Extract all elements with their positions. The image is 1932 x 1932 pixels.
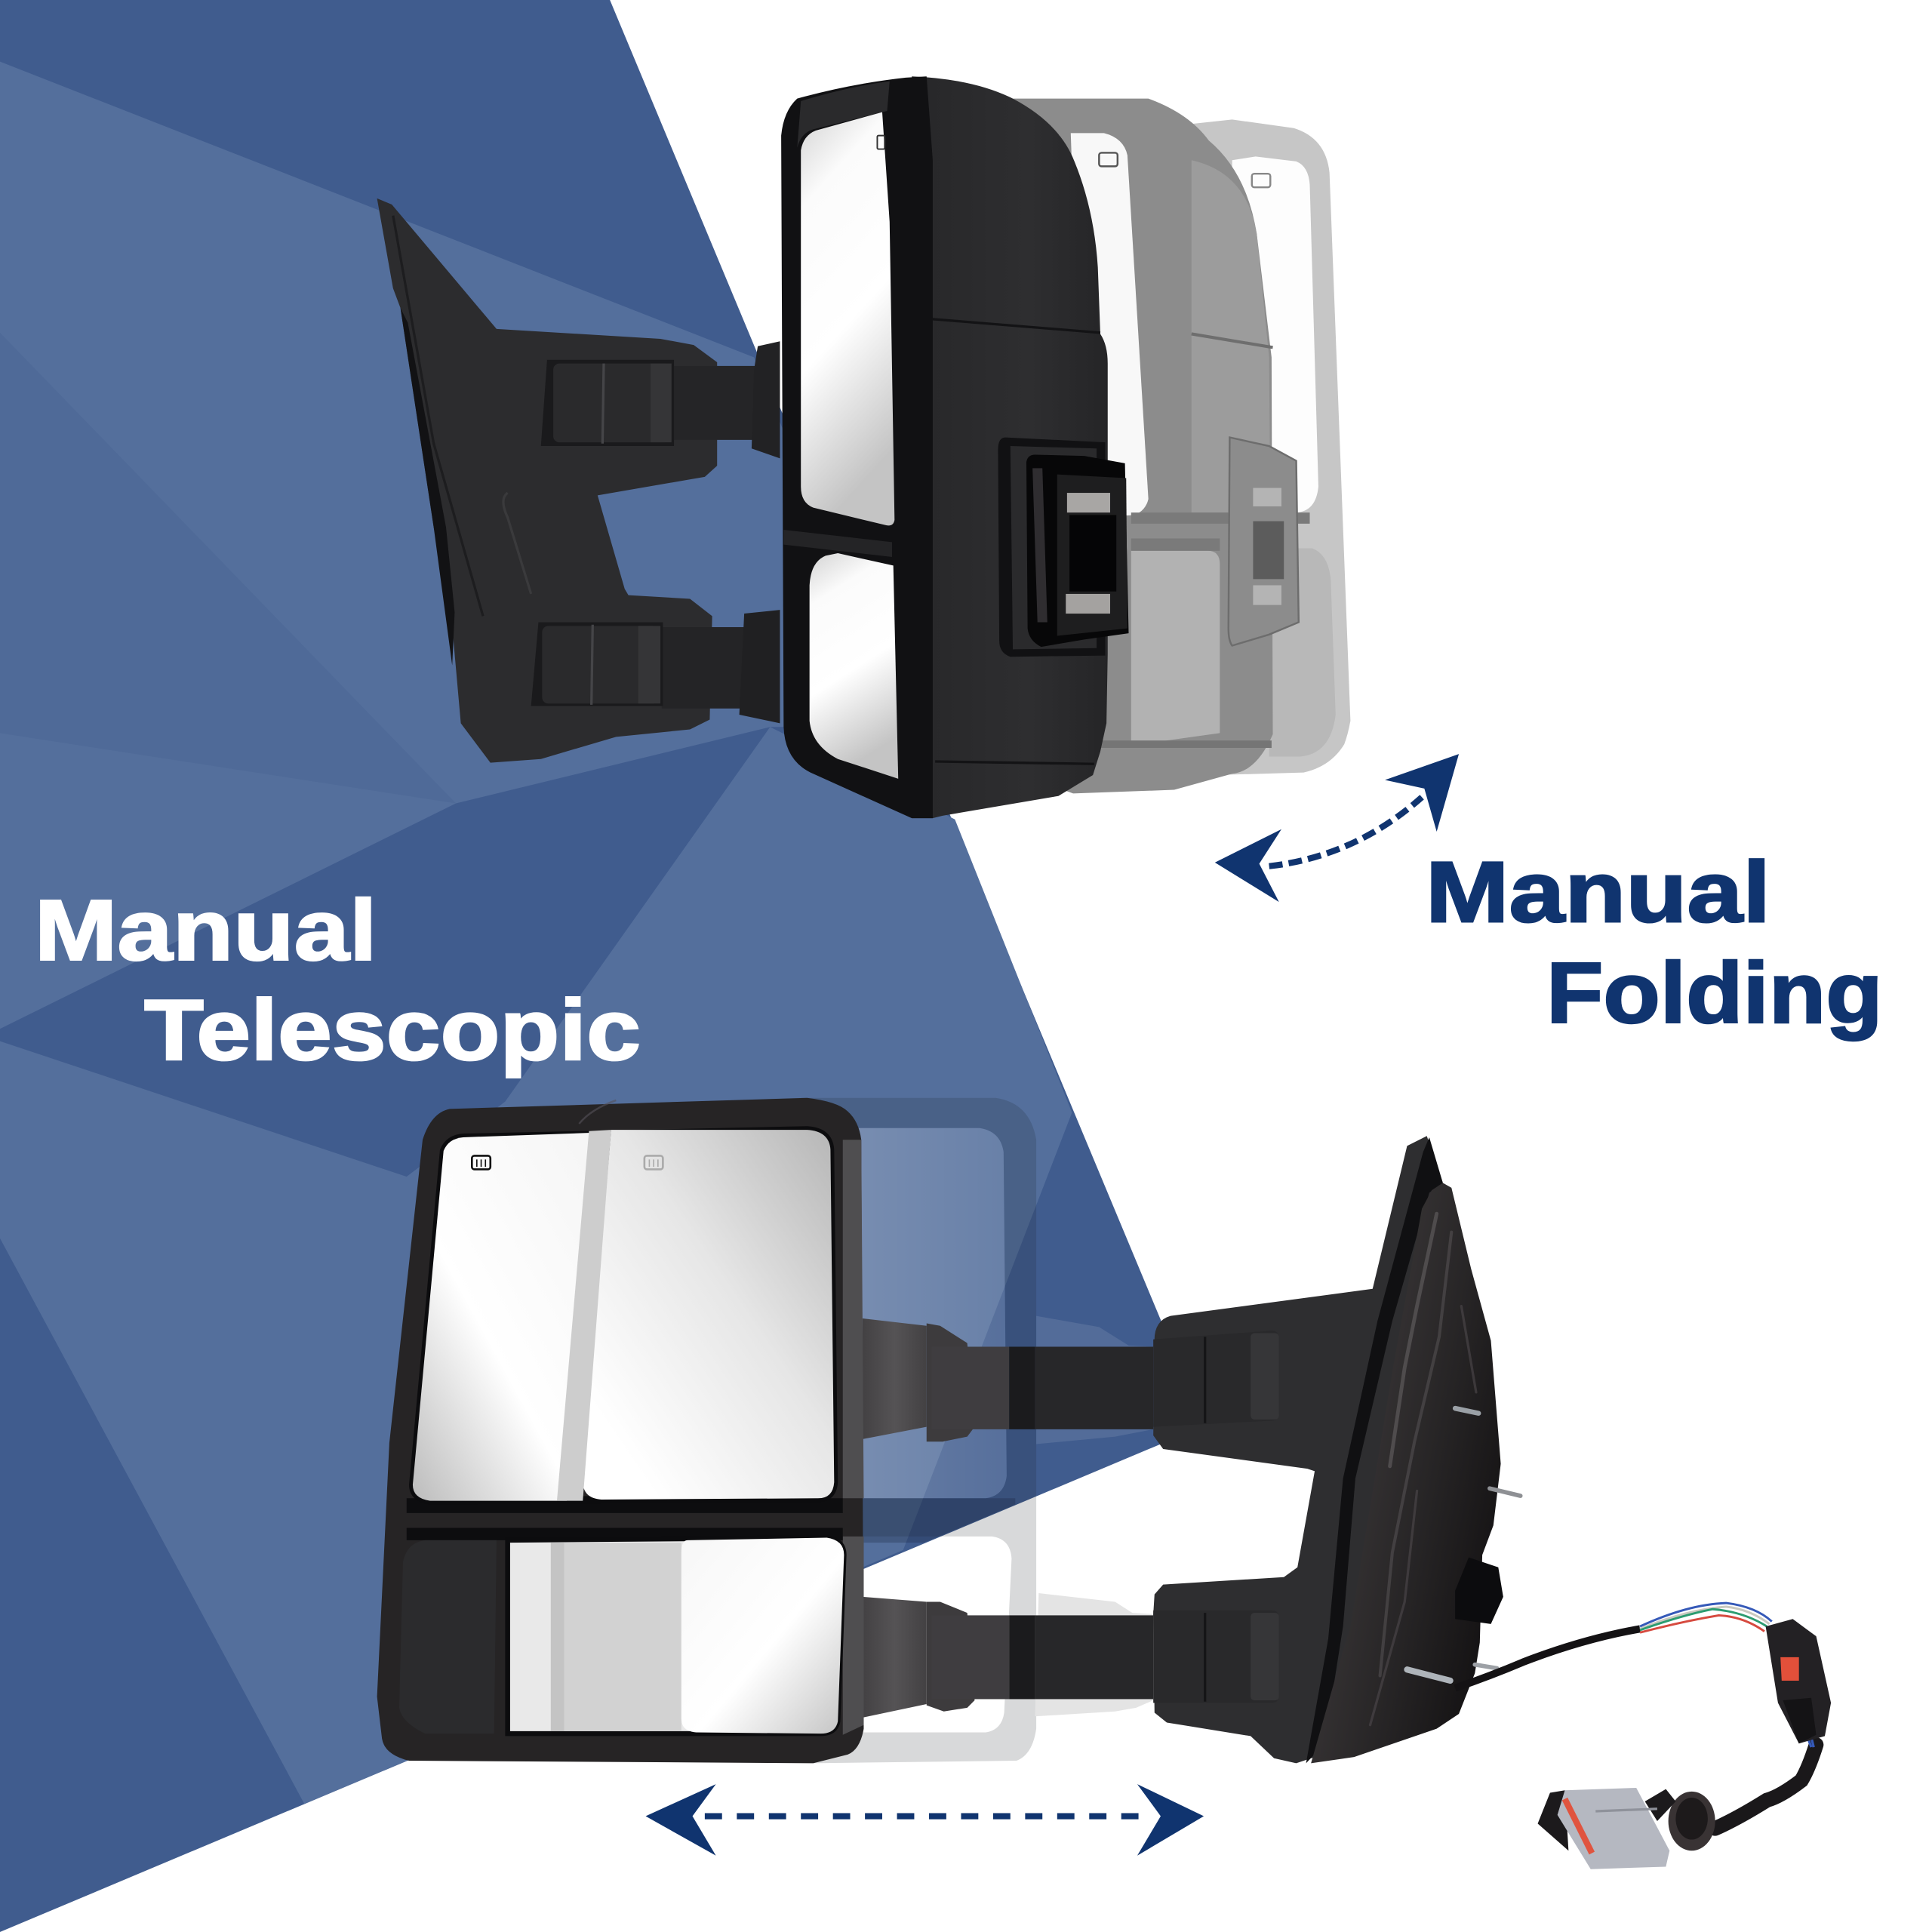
lower socket	[1153, 1611, 1279, 1703]
lower arm chamfer	[927, 1601, 974, 1712]
connector: round plug	[1645, 1789, 1715, 1850]
heading: Manual Folding	[1426, 844, 1883, 1041]
connector: grey plug	[1538, 1788, 1669, 1869]
heading: Manual Folding: Manual	[1426, 844, 1770, 940]
wire sleeve upper	[1455, 1629, 1640, 1688]
ghost arms	[1035, 1316, 1153, 1716]
defrost icon	[877, 136, 884, 149]
telescopic arrow	[646, 1784, 1204, 1856]
wire sleeve lower	[1715, 1745, 1817, 1829]
heading: Manual Telescopic: Telescopic	[144, 983, 641, 1078]
ghost mirror: folding rear position	[1084, 119, 1350, 779]
mounting bolts	[1407, 1408, 1521, 1681]
housing	[912, 76, 1108, 818]
glass outline ring	[413, 1130, 834, 1501]
connector: black with red tab	[1766, 1619, 1831, 1743]
upper socket	[1153, 1331, 1279, 1427]
upper mirror glass	[413, 1100, 834, 1501]
mounting bracket	[377, 198, 717, 763]
ghost signal lamp	[1229, 438, 1299, 646]
mirror: telescopic view	[377, 1098, 1521, 1763]
lower mirror glass	[810, 553, 898, 779]
mirror: folding view	[377, 76, 1129, 818]
lower mirror glass	[508, 1538, 844, 1734]
upper mirror glass	[801, 112, 894, 525]
lower telescopic arm	[531, 610, 780, 723]
lower arm collar	[863, 1597, 927, 1718]
wiring harness	[1455, 1603, 1817, 1829]
panel: blue faceted background	[0, 0, 1204, 1932]
black backing	[1306, 1137, 1443, 1763]
upper arm collar	[863, 1318, 927, 1439]
ghost mirror: folding middle position	[1013, 99, 1310, 793]
wrapped rear cover	[1311, 1183, 1501, 1763]
housing seams	[933, 319, 1100, 764]
ghost mirror: telescopic extended position	[801, 1098, 1036, 1763]
black tab	[1455, 1558, 1503, 1624]
ghost glass tint	[801, 1128, 1007, 1498]
upper telescopic arm	[541, 341, 780, 458]
upper arm bar	[931, 1346, 1153, 1429]
smoked signal lamp	[998, 438, 1129, 657]
lower pocket	[399, 1540, 497, 1734]
glass frame	[781, 76, 933, 818]
lower arm bar	[931, 1615, 1153, 1699]
defrost icons	[472, 1155, 663, 1169]
ghost centre band	[861, 1498, 1015, 1543]
heading: Manual Telescopic	[35, 883, 641, 1078]
ghost lower panels	[1131, 551, 1220, 746]
right mounting bracket	[1153, 1136, 1443, 1763]
heading: Manual Telescopic: Manual	[35, 883, 377, 979]
folding arrow	[1215, 754, 1459, 902]
mirror frame	[377, 1098, 863, 1763]
heading: Manual Folding: Folding	[1546, 946, 1883, 1041]
upper arm chamfer	[927, 1323, 974, 1441]
coloured wires	[1640, 1603, 1772, 1632]
